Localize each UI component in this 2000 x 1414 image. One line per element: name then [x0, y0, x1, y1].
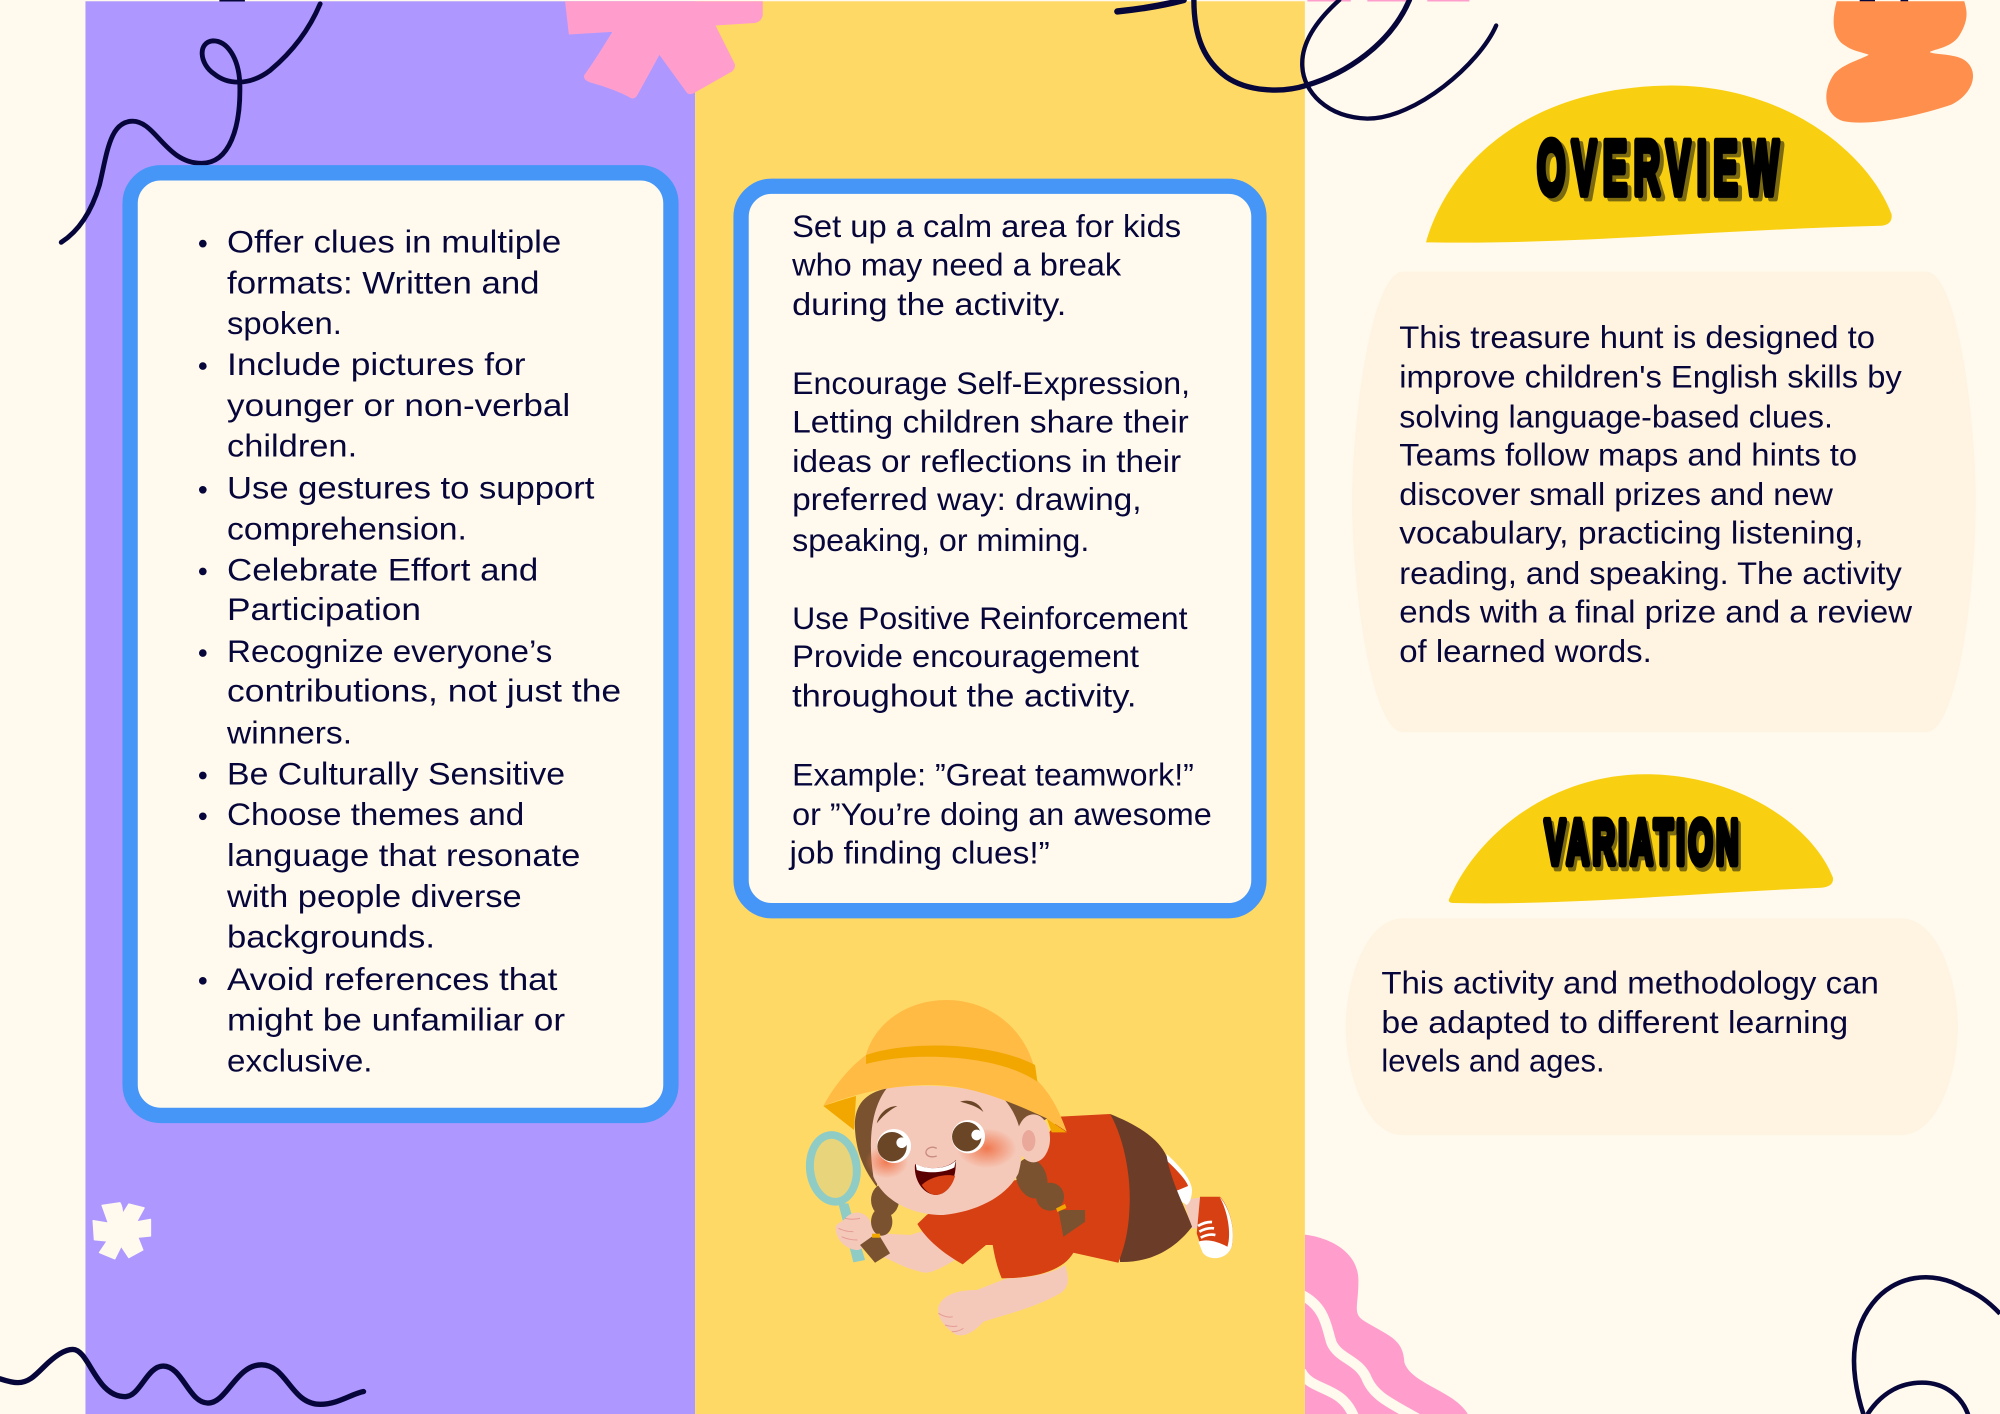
text: inclusive tips list: exclusive. [227, 1042, 372, 1078]
icon: white asterisk [93, 1203, 151, 1259]
decoration: bottom-right scribble [1854, 1277, 2000, 1414]
text: self-expression: speaking, or miming. [792, 522, 1089, 558]
text: inclusive tips list: Offer clues in multiple [227, 224, 561, 260]
text: inclusive tips list: spoken. [227, 305, 342, 341]
text: inclusive tips list [226, 224, 621, 1078]
text: positive reinforcement: throughout the activity. [792, 678, 1136, 714]
text: inclusive tips list: younger or non-verbal [227, 387, 570, 423]
text: inclusive tips list: Choose themes and [227, 796, 524, 832]
decoration: top-left squiggle [61, 4, 320, 242]
heading shadow: overview: OVERVIEW [1541, 129, 1783, 214]
panel: variation heading [1449, 774, 1833, 903]
illustration: girl with magnifying glass [802, 1000, 1233, 1335]
text: inclusive tips list: with people diverse [226, 878, 522, 914]
text: self-expression: preferred way: drawing, [792, 481, 1142, 517]
text: example praise: job finding clues!” [788, 835, 1050, 871]
text: inclusive tips list: Avoid references that [227, 961, 558, 997]
panel: middle guidance card [741, 186, 1259, 911]
text: variation description: levels and ages. [1381, 1042, 1605, 1078]
heading: overview: OVERVIEW [1537, 125, 1779, 210]
text: calm area: who may need a break [791, 247, 1121, 283]
text: self-expression: ideas or reflections in their [792, 443, 1182, 479]
text: example praise [788, 757, 1212, 871]
text: self-expression: Encourage Self-Expression, [792, 365, 1190, 401]
text: inclusive tips list: Participation [227, 591, 421, 627]
list bullets [199, 240, 207, 985]
text: overview description: ends with a final prize and a review [1399, 593, 1913, 629]
panel: overview heading [1426, 85, 1892, 243]
panel: middle yellow column [695, 1, 1305, 1414]
text: self-expression [792, 365, 1190, 558]
text: inclusive tips list: Include pictures for [227, 346, 526, 382]
text: inclusive tips list: comprehension. [227, 511, 467, 547]
text: overview description: of learned words. [1399, 633, 1652, 669]
text: overview description: solving language-based clues. [1399, 398, 1833, 434]
decoration: bottom-left wave [0, 1349, 364, 1404]
text: inclusive tips list: might be unfamiliar or [227, 1002, 565, 1038]
decoration: orange blob [1826, 1, 1973, 123]
text: overview description: Teams follow maps and hints to [1399, 437, 1857, 473]
text: inclusive tips list: children. [227, 428, 357, 464]
panel: left purple column [85, 1, 695, 1414]
text: overview description: reading, and speaking. The activity [1399, 555, 1902, 591]
text: example praise: or ”You’re doing an awesome [792, 796, 1212, 832]
text: inclusive tips list: language that resonate [227, 837, 580, 873]
text: positive reinforcement: Provide encouragement [792, 638, 1139, 674]
text: inclusive tips list: formats: Written and [227, 264, 540, 300]
text: positive reinforcement: Use Positive Reinforcement [792, 600, 1188, 636]
text: overview description: improve children's English skills by [1399, 359, 1902, 395]
text: inclusive tips list: winners. [226, 715, 352, 751]
text: overview description: This treasure hunt is designed to [1399, 319, 1875, 355]
text: calm area: Set up a calm area for kids [792, 208, 1181, 244]
text: inclusive tips list: Celebrate Effort and [227, 551, 538, 587]
panel: overview text background [1352, 272, 1976, 732]
heading shadow: variation: VARIATION [1547, 812, 1741, 881]
text: self-expression: Letting children share their [792, 403, 1189, 439]
text: overview description: vocabulary, practicing listening, [1399, 514, 1864, 550]
decoration: pink top dashes [1307, 0, 1469, 2]
text: overview description: discover small prizes and new [1399, 476, 1834, 512]
text: overview description [1399, 319, 1913, 669]
text: variation description: be adapted to different learning [1381, 1004, 1848, 1040]
text: inclusive tips list: Use gestures to support [227, 470, 595, 506]
heading: variation: VARIATION [1545, 808, 1739, 877]
text: example praise: Example: ”Great teamwork!” [792, 757, 1194, 793]
text: variation description: This activity and methodology can [1381, 965, 1879, 1001]
panel: variation text background [1346, 918, 1958, 1135]
decoration: pink flower top [565, 1, 763, 98]
decoration: bottom pink wave [1301, 1235, 1468, 1414]
panel: left tips card [130, 173, 671, 1115]
text: inclusive tips list: backgrounds. [227, 919, 435, 955]
text: inclusive tips list: contributions, not just the [227, 673, 621, 709]
text: inclusive tips list: Be Culturally Sensitive [227, 755, 565, 791]
text: calm area: during the activity. [792, 286, 1066, 322]
text: variation description [1381, 965, 1879, 1078]
decoration: top-centre scribble [1117, 0, 1496, 119]
text: positive reinforcement [792, 600, 1188, 714]
decoration: dark top ink marks [219, 0, 1908, 2]
text: calm area [791, 208, 1181, 322]
text: inclusive tips list: Recognize everyone’s [227, 633, 552, 669]
